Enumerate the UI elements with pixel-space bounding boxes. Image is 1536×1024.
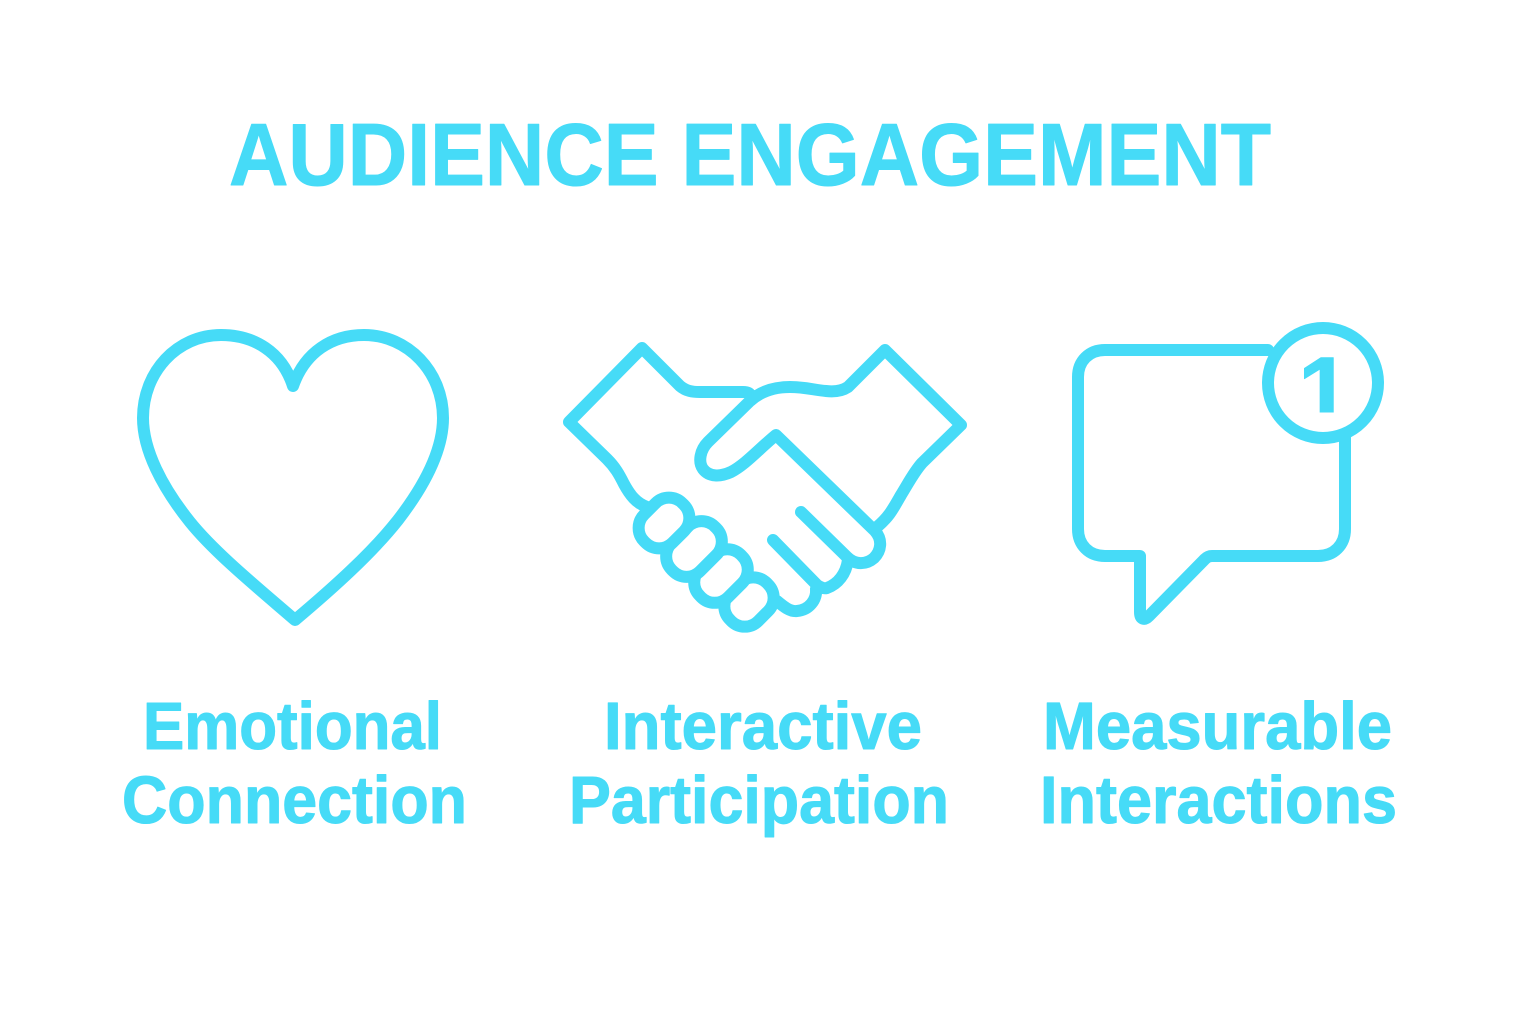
left hand finger 4 (716, 569, 782, 635)
label: Measurable Interactions: Measurable (1043, 689, 1392, 764)
left hand finger 3 (686, 541, 756, 611)
icon: heart (143, 335, 443, 620)
label: Emotional Connection: Emotional (143, 689, 442, 764)
right hand and thumb (700, 350, 961, 563)
left hand outline (569, 348, 751, 507)
label: Measurable Interactions: Interactions (1040, 763, 1397, 838)
title: AUDIENCE ENGAGEMENT (229, 105, 1271, 204)
label: Interactive Participation: Interactive (604, 689, 922, 764)
label: Emotional Connection: Connection (122, 763, 467, 838)
speech bubble (1078, 350, 1345, 619)
label: Measurable Interactions (1040, 689, 1397, 838)
icon: handshake (569, 348, 961, 635)
notification badge (1268, 328, 1378, 438)
badge number: 1 (1298, 338, 1351, 444)
right hand fingers (773, 540, 848, 588)
label: Interactive Participation (569, 689, 949, 838)
label: Interactive Participation: Participation (569, 763, 949, 838)
left hand finger 1 (631, 490, 697, 556)
left hand finger 2 (658, 513, 730, 585)
label: Emotional Connection (122, 689, 467, 838)
icon: chat bubble with notification badge (1078, 328, 1378, 619)
